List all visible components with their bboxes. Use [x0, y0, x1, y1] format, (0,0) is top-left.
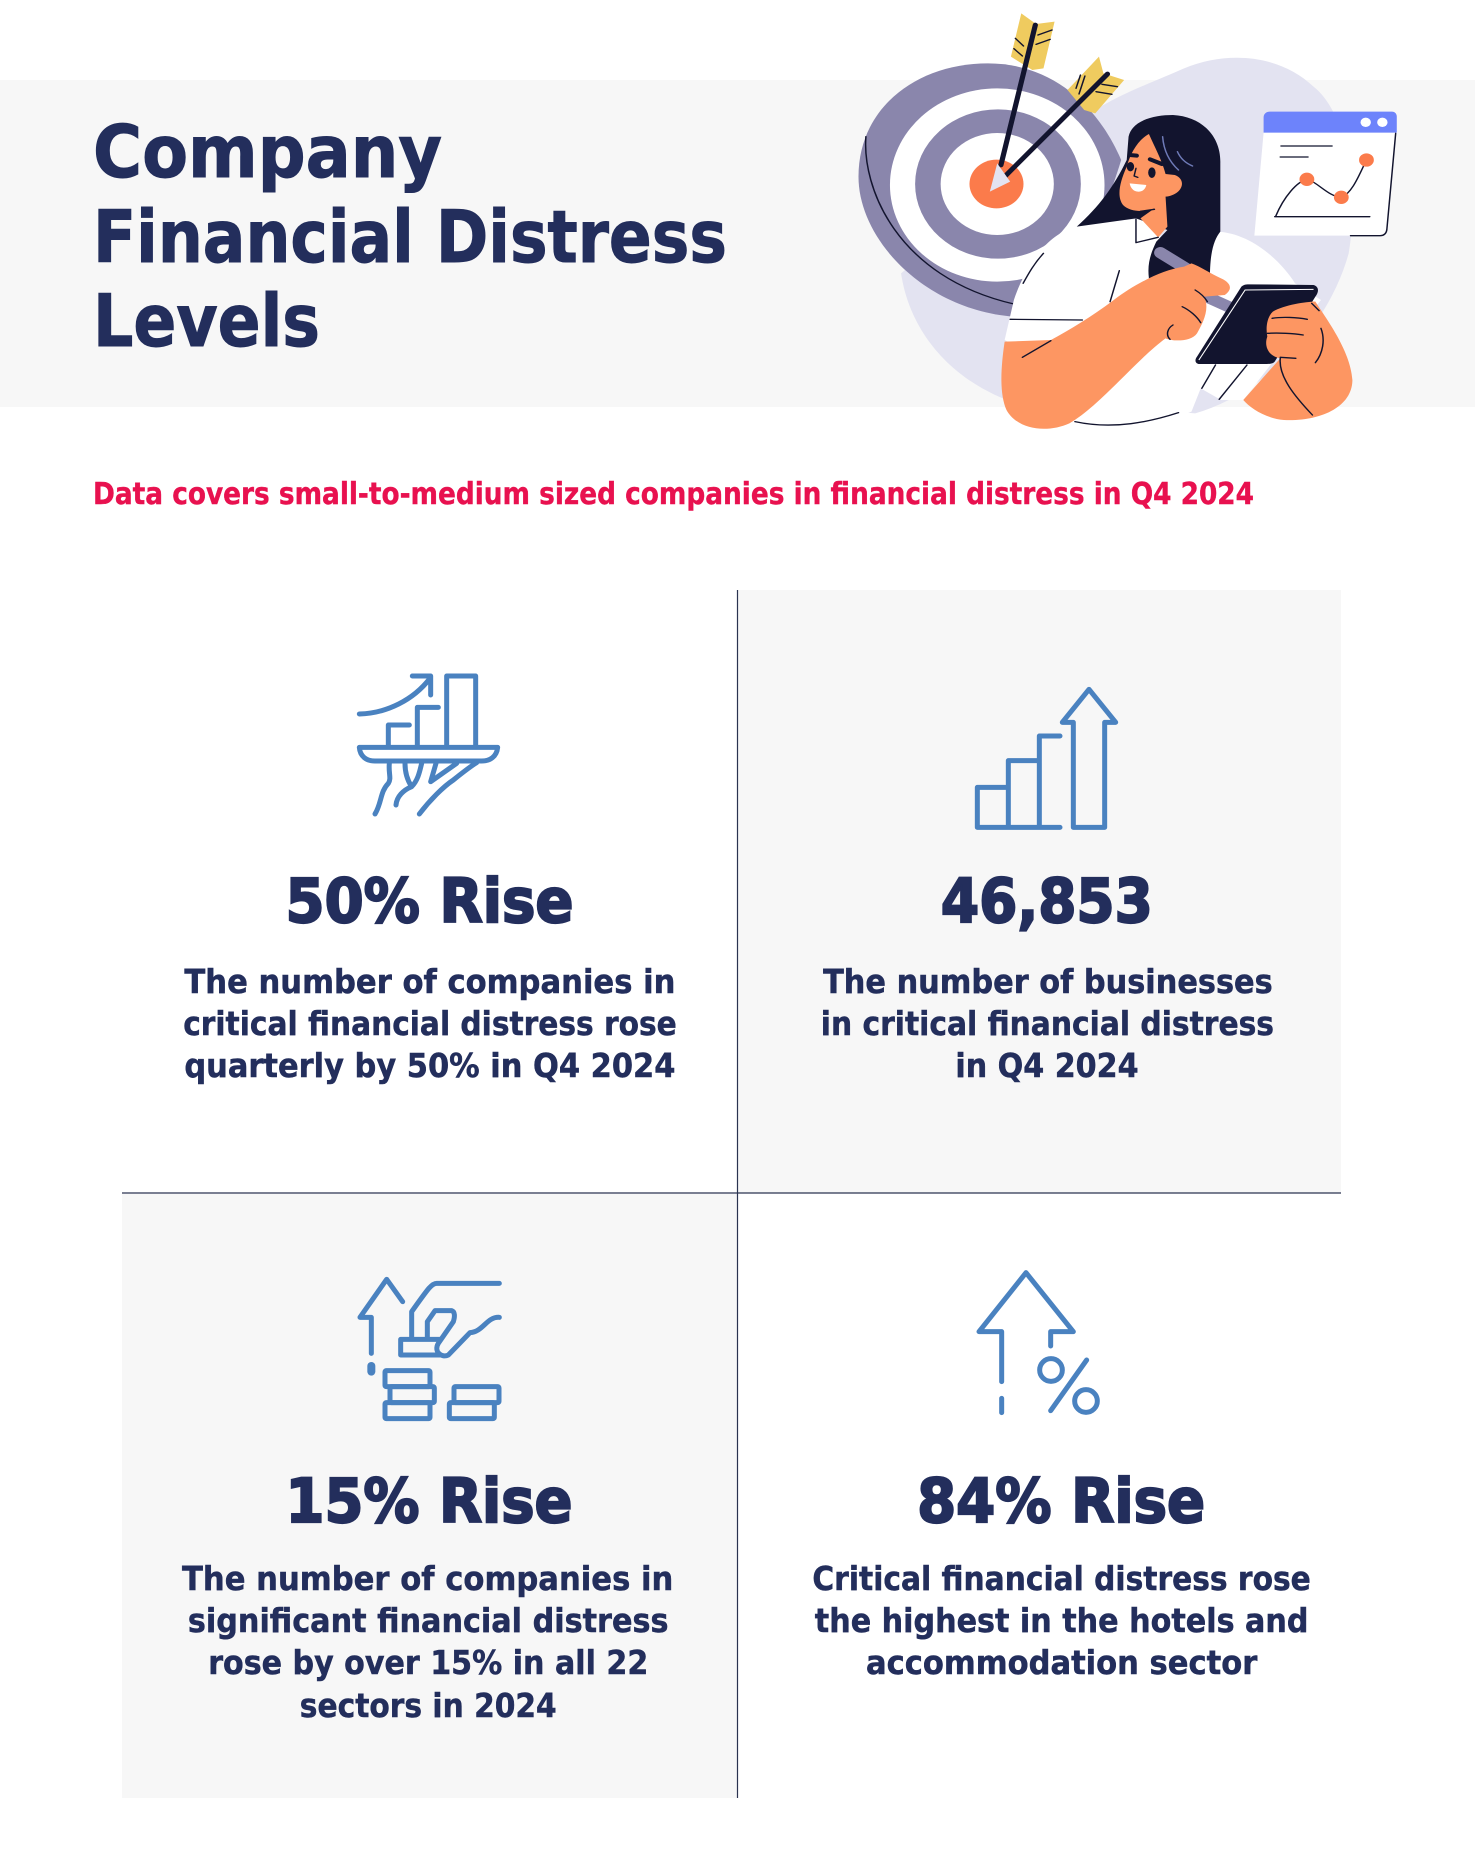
title: Company: [93, 110, 442, 194]
description: in critical financial distress: [821, 1004, 1274, 1043]
title: [93, 110, 727, 363]
icon: up arrow with percent sign: [979, 1273, 1097, 1413]
panel: 50% rise: [183, 676, 677, 1085]
description: [182, 1559, 673, 1725]
shirt: [1005, 218, 1321, 426]
description: rose by over 15% in all 22: [208, 1643, 648, 1682]
icon: hand stacking coins with up arrow: [360, 1279, 499, 1419]
description: [821, 962, 1274, 1085]
panel: 15% rise: [182, 1279, 673, 1725]
arrow: lower: [990, 57, 1124, 192]
title: Levels: [93, 279, 320, 363]
description: The number of businesses: [823, 962, 1273, 1001]
description: Critical financial distress rose: [812, 1559, 1311, 1598]
description: The number of companies in: [182, 1559, 673, 1598]
subtitle: Data covers small-to-medium sized companies in financial distress in Q4 2024: [93, 477, 1254, 512]
description: sectors in 2024: [300, 1686, 557, 1725]
description: [812, 1559, 1311, 1682]
illustration: woman with target and chart: [858, 13, 1397, 429]
panel shading: top right: [738, 590, 1341, 1193]
right fingers: [1266, 302, 1315, 358]
icon: hand holding rising bar chart on tray: [359, 676, 498, 814]
description: in Q4 2024: [955, 1046, 1139, 1085]
hair: [1077, 115, 1220, 278]
neck and face: [1119, 134, 1182, 237]
stat heading: 84% Rise: [917, 1466, 1205, 1537]
description: accommodation sector: [866, 1643, 1258, 1682]
arrow: upper: [1001, 13, 1055, 165]
description: [183, 962, 677, 1085]
background blob: [901, 58, 1353, 413]
woman: [1001, 115, 1352, 429]
description: quarterly by 50% in Q4 2024: [184, 1046, 675, 1085]
panel: 84% rise: [812, 1273, 1311, 1682]
tablet: [1195, 284, 1318, 364]
panel: 46,853 businesses: [821, 689, 1274, 1085]
panel shading: bottom left: [122, 1194, 737, 1798]
stat heading: 50% Rise: [286, 866, 574, 937]
chart window: [1254, 112, 1397, 236]
description: The number of companies in: [184, 962, 675, 1001]
icon: bars with up arrow: [977, 689, 1116, 827]
right arm: [1243, 302, 1352, 420]
shirt lines: [1010, 253, 1247, 425]
pen: [1160, 253, 1232, 308]
title: Financial Distress: [93, 195, 727, 279]
stat heading: 15% Rise: [286, 1466, 572, 1537]
left arm and hand: [1001, 263, 1230, 429]
facial features: [1127, 137, 1193, 243]
description: critical financial distress rose: [183, 1004, 677, 1043]
description: the highest in the hotels and: [815, 1601, 1308, 1640]
target: [858, 63, 1121, 317]
description: significant financial distress: [188, 1601, 668, 1640]
stat heading: 46,853: [941, 866, 1153, 937]
header band: [0, 80, 1475, 407]
